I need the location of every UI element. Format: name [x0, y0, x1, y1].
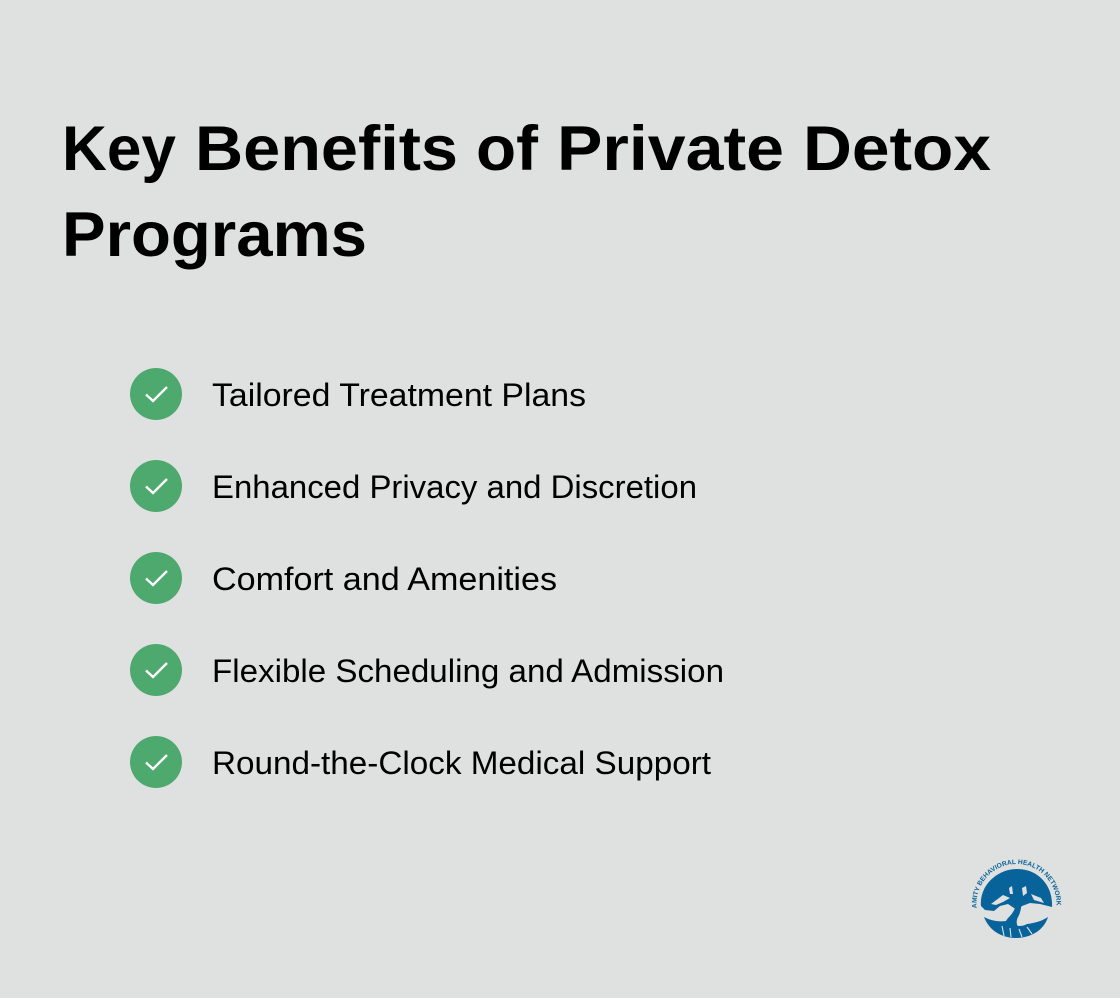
- item: Flexible Scheduling and Admission: Flexible Scheduling and Admission: [212, 653, 724, 689]
- checklist: [130, 368, 724, 788]
- title: Private: [557, 114, 784, 184]
- logo canopy gaps: [991, 886, 1044, 905]
- logo ring text: AMITY BEHAVIORAL HEALTH NETWORK: [972, 859, 1062, 908]
- item: Flexible Scheduling and Admission: [130, 644, 724, 696]
- item: Comfort and Amenities: Comfort and Amenities: [212, 561, 557, 597]
- logo tree trunk and branches: [1005, 890, 1021, 930]
- item: Tailored Treatment Plans: [130, 368, 586, 420]
- logo root lines: [1002, 926, 1032, 937]
- item: Tailored Treatment Plans: Tailored Treatment Plans: [212, 377, 586, 413]
- item: Round-the-Clock Medical Support: [130, 736, 711, 788]
- item: Enhanced Privacy and Discretion: Enhanced Privacy and Discretion: [212, 469, 697, 505]
- item: Comfort and Amenities: [130, 552, 557, 604]
- item: Round-the-Clock Medical Support: Round-the-Clock Medical Support: [212, 745, 711, 781]
- logo roots bowl: [984, 917, 1048, 938]
- item: Enhanced Privacy and Discretion: [130, 460, 697, 512]
- title: Key: [62, 114, 176, 184]
- logo tree canopy: [981, 869, 1052, 911]
- title: Detox: [803, 114, 991, 184]
- logo: Amity Behavioral Health Network: [972, 859, 1062, 938]
- title: of: [476, 114, 539, 184]
- title: Programs: [62, 200, 367, 270]
- title: [62, 114, 991, 270]
- title: Benefits: [195, 114, 458, 184]
